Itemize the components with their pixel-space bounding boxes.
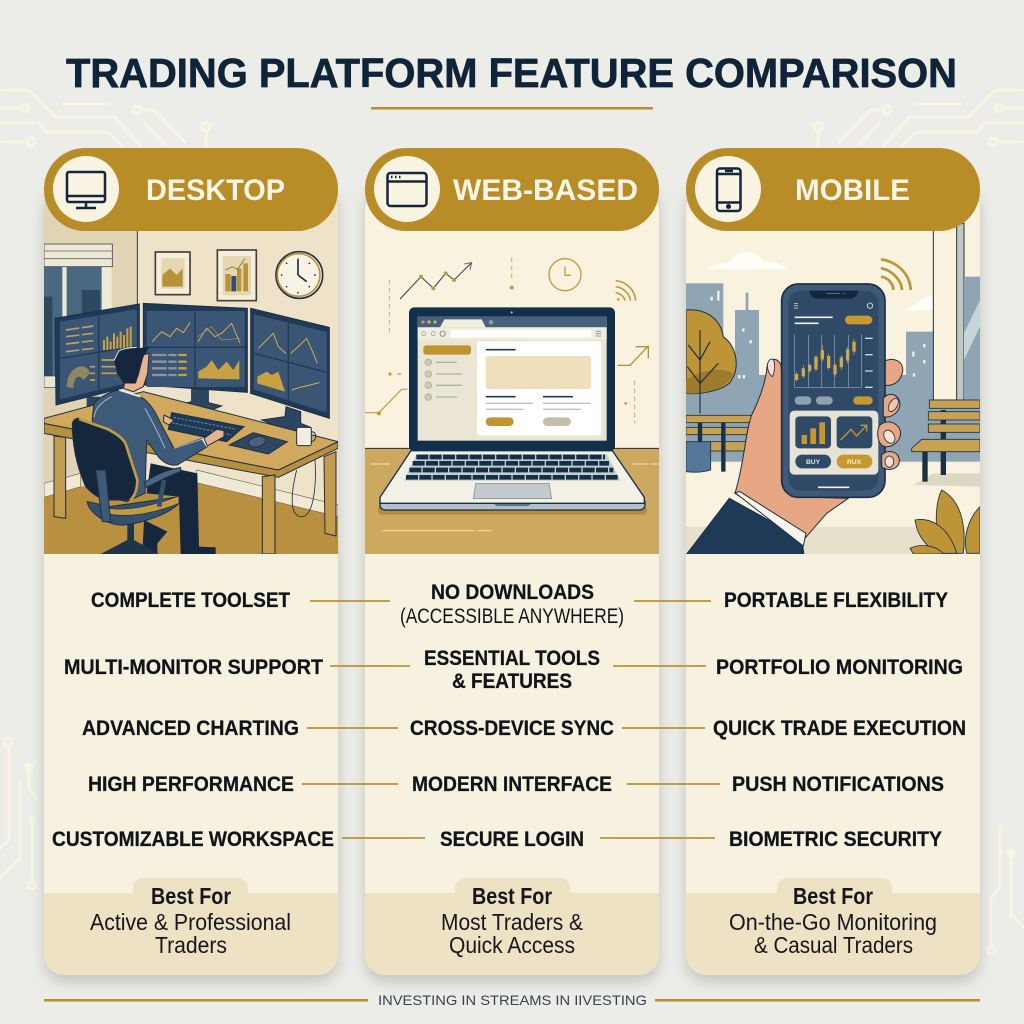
title underline — [371, 107, 653, 110]
circuit decoration: lower left — [0, 738, 36, 889]
hand behind fingers — [883, 359, 903, 385]
features: desktop: ADVANCED CHARTING — [82, 717, 299, 740]
title: TRADING PLATFORM FEATURE COMPARISON — [66, 50, 957, 96]
text background — [365, 554, 659, 893]
header: web-based: WEB-BASED — [453, 174, 638, 207]
features: web-based: ESSENTIAL TOOLS — [424, 647, 600, 670]
header: web-based — [365, 148, 659, 231]
features: web-based — [400, 581, 624, 851]
features: web-based: NO DOWNLOADS — [431, 581, 594, 604]
best for: desktop — [90, 883, 291, 958]
frames — [155, 252, 190, 295]
features: desktop: CUSTOMIZABLE WORKSPACE — [52, 828, 334, 851]
features: desktop — [52, 589, 334, 851]
illustration: trader at desktop with three monitors — [44, 190, 338, 554]
chair armrests — [96, 470, 111, 522]
best for: web-based: Most Traders & — [441, 909, 583, 935]
center monitor content — [147, 312, 245, 387]
jacket — [92, 390, 207, 502]
illustration: laptop with browser — [365, 190, 659, 554]
features: desktop: HIGH PERFORMANCE — [88, 773, 294, 796]
pants — [147, 463, 216, 554]
desk — [44, 423, 338, 477]
palm — [735, 359, 848, 538]
plant — [910, 490, 980, 554]
best for: desktop: Traders — [155, 932, 227, 958]
panel: mobile — [686, 148, 980, 982]
chair base — [101, 523, 159, 554]
features: desktop: COMPLETE TOOLSET — [91, 589, 290, 612]
features: mobile — [713, 589, 966, 851]
fingers — [883, 394, 900, 417]
best for: mobile: On-the-Go Monitoring — [729, 909, 937, 935]
best for: web-based — [441, 883, 583, 958]
jacket sleeve — [686, 498, 804, 555]
monitors — [55, 304, 139, 405]
laptop shadow — [378, 506, 647, 515]
icon: browser window — [388, 173, 426, 206]
best for: web-based: Best For — [472, 883, 552, 909]
features: mobile: PUSH NOTIFICATIONS — [732, 773, 944, 796]
text background — [44, 554, 338, 893]
text background — [686, 554, 980, 893]
mouse pad — [229, 433, 287, 454]
header: mobile: MOBILE — [795, 174, 910, 207]
features: web-based: MODERN INTERFACE — [412, 773, 612, 796]
features: mobile: PORTABLE FLEXIBILITY — [724, 589, 948, 612]
best for: mobile: & Casual Traders — [754, 932, 913, 958]
neck, head — [123, 353, 149, 392]
icon: desktop monitor — [67, 172, 105, 208]
footer rules — [44, 999, 980, 1002]
features: mobile: PORTFOLIO MONITORING — [716, 656, 963, 679]
circuit decoration: top left — [0, 90, 210, 147]
left monitor content — [61, 317, 137, 390]
illustration: hand holding phone: RUX — [847, 459, 862, 466]
features: web-based: & FEATURES — [452, 670, 572, 693]
circuit decoration: lower right — [987, 826, 1024, 954]
hands — [163, 415, 224, 446]
phone — [782, 284, 885, 497]
laptop screen — [409, 307, 615, 451]
features: desktop: MULTI-MONITOR SUPPORT — [64, 656, 323, 679]
best for: mobile: Best For — [793, 883, 873, 909]
best for: desktop: Best For — [151, 883, 231, 909]
stands — [186, 388, 224, 410]
mug — [297, 427, 311, 446]
footer text: INVESTING IN STREAMS IN IIVESTING — [378, 992, 647, 1008]
features: web-based: CROSS-DEVICE SYNC — [410, 717, 614, 740]
circuit decoration: top right — [814, 90, 1024, 147]
illustration: hand holding phone: BUY — [806, 459, 821, 466]
laptop base — [380, 502, 645, 510]
header: desktop: DESKTOP — [146, 174, 285, 207]
header: desktop — [44, 148, 338, 231]
features: web-based: SECURE LOGIN — [440, 828, 584, 851]
clock — [276, 252, 323, 298]
header: mobile — [686, 148, 980, 231]
candlestick chart — [794, 334, 862, 387]
features: mobile: BIOMETRIC SECURITY — [729, 828, 942, 851]
wifi arcs — [881, 259, 911, 290]
right monitor content — [254, 323, 327, 403]
best for: web-based: Quick Access — [449, 932, 575, 958]
features: mobile: QUICK TRADE EXECUTION — [713, 717, 966, 740]
panel: desktop — [44, 148, 338, 982]
best for: mobile — [729, 883, 937, 958]
benches — [686, 415, 753, 451]
icon: smartphone — [717, 168, 740, 211]
features: web-based: (ACCESSIBLE ANYWHERE) — [400, 605, 624, 628]
panel: web-based — [365, 148, 659, 982]
illustration: hand holding phone — [686, 190, 980, 555]
tree — [686, 310, 736, 394]
keyboard — [168, 413, 244, 442]
chair seat — [87, 497, 179, 525]
connector lines — [302, 601, 720, 838]
chair back — [72, 418, 137, 500]
best for: desktop: Active & Professional — [90, 909, 291, 935]
